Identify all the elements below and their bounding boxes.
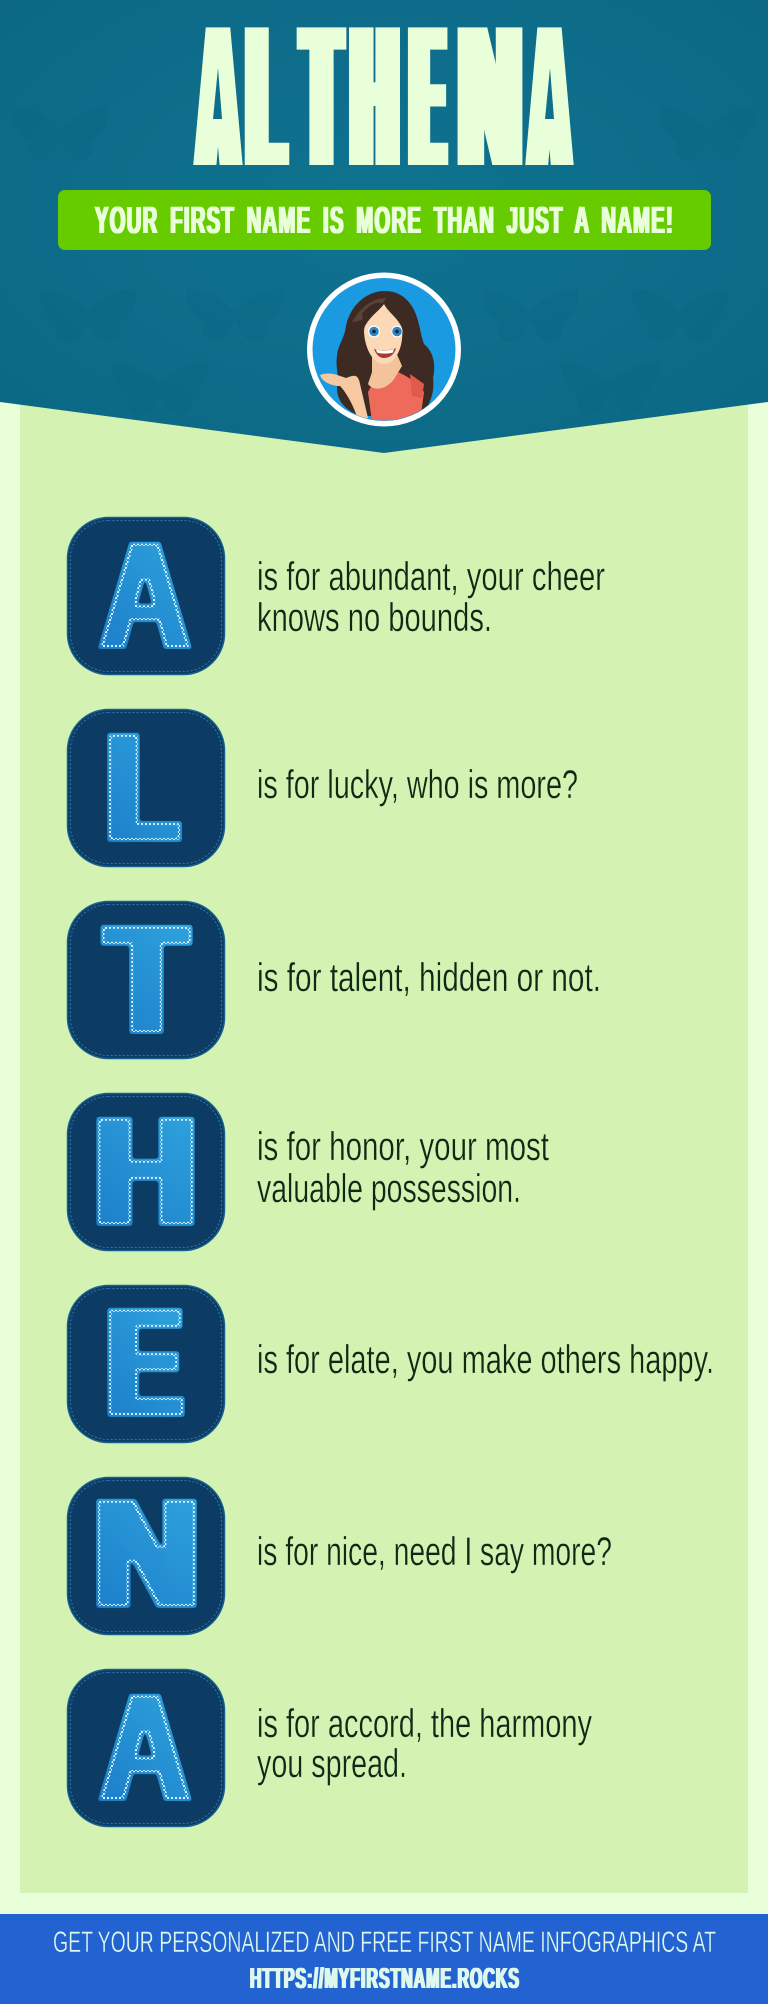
text: H line: is for honor, your most xyxy=(257,1125,549,1169)
letter row E: E xyxy=(108,1277,181,1448)
footer band: HTTPS://MYFIRSTNAME.ROCKS xyxy=(250,1963,520,1995)
text: A line: knows no bounds. xyxy=(257,596,492,640)
letter row A: A xyxy=(100,510,190,681)
letter row H: H xyxy=(95,1086,196,1257)
text: second A line xyxy=(257,1702,592,1786)
letter row N: N xyxy=(94,1468,198,1639)
text: L line: is for lucky, who is more? xyxy=(257,763,578,807)
letter row T: T xyxy=(107,894,186,1065)
text: A line xyxy=(257,555,605,640)
header banner xyxy=(0,0,768,453)
tagline banner xyxy=(58,190,711,250)
text: A line: is for abundant, your cheer xyxy=(257,555,605,599)
panel: letters background xyxy=(20,395,748,1893)
footer band xyxy=(0,1914,768,2004)
letter row L: L xyxy=(108,702,178,873)
text: N line: is for nice, need I say more? xyxy=(257,1530,612,1574)
title letter counters xyxy=(213,68,554,119)
letter row A (second): A xyxy=(100,1662,190,1833)
avatar: cartoon woman xyxy=(307,272,461,426)
letter row T xyxy=(68,894,224,1065)
text: second A line: is for accord, the harmony xyxy=(257,1702,592,1746)
text: second A line: you spread. xyxy=(257,1742,407,1786)
text: H line: valuable possession. xyxy=(257,1167,521,1211)
text: T line: is for talent, hidden or not. xyxy=(257,956,601,1000)
text: H line xyxy=(257,1125,549,1211)
letter row E xyxy=(68,1277,224,1448)
letter row L xyxy=(68,702,224,873)
